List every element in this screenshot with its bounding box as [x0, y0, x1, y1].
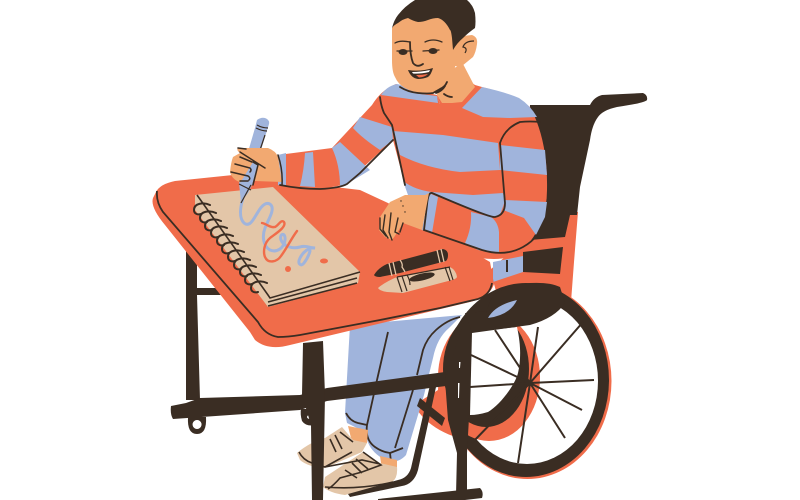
wheel spokes	[470, 322, 594, 463]
nose	[410, 42, 423, 66]
crayon section over fingers	[240, 162, 258, 185]
wheelchair back and handle	[490, 93, 647, 305]
resting hand	[379, 193, 429, 240]
mouth	[408, 68, 433, 79]
dark crayon	[374, 249, 448, 277]
desk crossbar	[171, 372, 446, 419]
face	[392, 12, 457, 93]
ear	[452, 35, 477, 66]
hand	[230, 148, 282, 183]
blue crayon	[239, 118, 269, 202]
beige crayon	[378, 267, 457, 293]
desk frame	[171, 235, 446, 500]
desk top	[152, 175, 494, 347]
boy's head	[392, 0, 482, 106]
chin line	[400, 82, 452, 97]
sweater base	[278, 84, 547, 259]
desk left leg	[186, 235, 222, 400]
eyes and brows	[395, 40, 442, 51]
caster right	[301, 409, 316, 426]
sweater	[278, 84, 547, 259]
caster left	[188, 417, 206, 434]
orange scribble	[262, 221, 297, 261]
shoes and socks	[297, 426, 397, 495]
hair	[392, 0, 476, 50]
crayons on desk	[374, 249, 457, 293]
seat cushion block	[523, 247, 563, 274]
sweater outlines	[280, 97, 540, 253]
drawing hand and blue crayon	[230, 118, 282, 203]
footrest frame	[348, 315, 483, 500]
sweater blue stripes	[278, 84, 547, 253]
collar	[437, 78, 482, 106]
trousers	[345, 256, 523, 462]
neck	[437, 62, 475, 103]
notebook	[194, 187, 360, 307]
blue scribble	[240, 198, 315, 265]
desk right leg	[302, 341, 325, 500]
notebook spiral binding	[194, 203, 267, 292]
fender over the wheel	[465, 283, 565, 333]
wheelchair wheel	[414, 247, 612, 479]
